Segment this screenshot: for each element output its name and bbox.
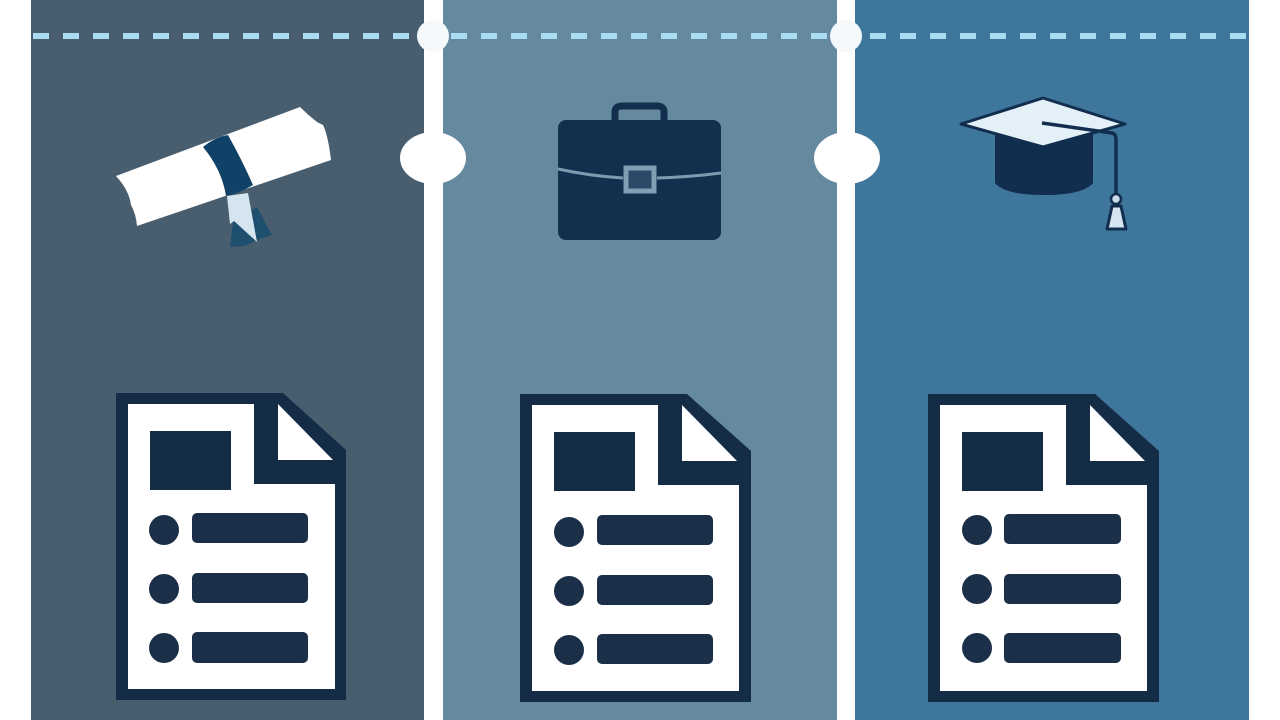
panel: diploma column [31, 0, 424, 720]
dashed timeline: column 1 [33, 33, 414, 39]
connector node: first top [417, 20, 449, 52]
document: column 1 [116, 393, 346, 700]
panel: briefcase column [443, 0, 837, 720]
dashed timeline: column 2 [451, 33, 830, 39]
document: column 2 [520, 394, 751, 702]
panel: graduation cap column [855, 0, 1249, 720]
connector node: second top [830, 20, 862, 52]
icon: diploma scroll [116, 107, 331, 247]
icon: graduation cap [961, 98, 1126, 229]
icon: briefcase [558, 106, 721, 240]
dashed timeline: column 3 [870, 33, 1247, 39]
document: column 3 [928, 394, 1159, 702]
connector node: second large [814, 132, 880, 184]
connector node: first large [400, 132, 466, 184]
